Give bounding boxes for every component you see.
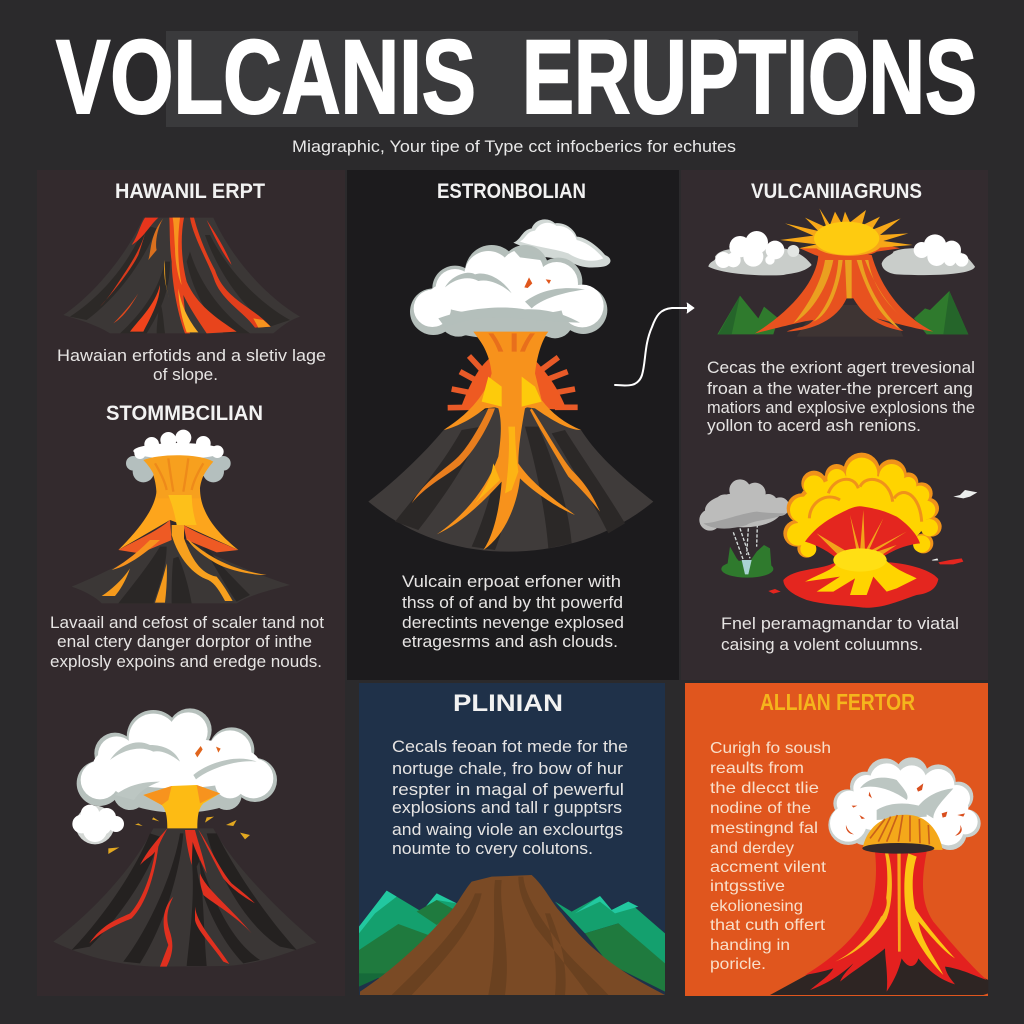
text: Allian description: reaults from [710,760,804,777]
text: Vulcanian description: yollon to acerd ash renions. [707,417,921,435]
illustration: Strombolian volcano [72,430,290,603]
text: fireball description: caising a volent coluumns. [721,636,923,654]
text: Strombolian description: explosly expoins and eredge nouds. [50,653,322,671]
illustration: Vulcanian volcano with sunburst [708,208,975,337]
heading: Strombolian: STOMMBCILIAN [106,402,263,425]
text: Plinian description: Cecals feoan fot mede for the [392,738,628,756]
illustration: erupting volcano with cloud [53,708,317,967]
title: VOLCANIS [56,19,476,136]
arrow: curved pointer [615,303,694,386]
panel: right column [681,170,988,680]
text: Allian description: accment vilent [710,859,827,876]
text: Estronbolian description [402,573,624,651]
illustration: large volcano with cloud [368,219,653,552]
text: Allian description: nodine of the [710,800,811,817]
text: Allian description: and derdey [710,840,794,857]
text: Allian description: poricle. [710,956,766,973]
text: Vulcanian description [707,359,975,435]
text: Hawaiian description [57,347,326,384]
text: Strombolian description: enal ctery danger dorptor of inthe [57,633,312,651]
heading: Hawaiian: HAWANIL ERPT [115,180,265,203]
illustration: Allian volcano [770,757,988,995]
panel: center column [347,170,679,680]
heading: Vulcanian: VULCANIIAGRUNS [751,180,922,203]
text: Allian description: intgsstive [710,878,785,895]
text: Strombolian description: Lavaail and cefost of scaler tand not [50,614,324,632]
text: Hawaiian description: Hawaian erfotids and a sletiv lage [57,347,326,365]
text: Vulcanian description: froan a the water-the prercert ang [707,380,973,398]
text: Estronbolian description: derectints nevenge explosed [402,614,624,632]
text: Plinian description: noumte to cvery colutons. [392,840,593,858]
panel: Plinian [359,683,665,995]
title [56,19,977,136]
text: Plinian description: nortuge chale, fro bow of hur [392,760,624,778]
text: Allian description: handing in [710,937,790,954]
text: Plinian description: explosions and tall r gupptsrs [392,799,622,817]
text: Estronbolian description: thss of of and by tht powerfd [402,594,623,612]
text: Allian description: ekolionesing [710,898,803,915]
heading: Estronbolian: ESTRONBOLIAN [437,180,586,203]
text: Plinian description [392,738,628,858]
text: Allian description: mestingnd fal [710,820,818,837]
text: Allian description: that cuth offert [710,917,826,934]
illustration: fireball explosion and storm cloud [699,453,977,608]
text: Plinian description: respter in magal of pewerful [392,781,624,799]
illustration: Hawaiian volcano [63,218,300,333]
text: Hawaiian description: of slope. [153,366,218,384]
text: Strombolian description [50,614,324,671]
panel: left column [37,170,345,996]
text: Vulcanian description: Cecas the exriont agert trevesional [707,359,975,377]
illustration: mountains [359,875,665,995]
text: Allian description: the dlecct tlie [710,780,819,797]
text: Vulcanian description: matiors and explosive explosions the [707,399,975,417]
heading: Plinian: PLINIAN [453,690,563,717]
text: Allian description [710,740,831,973]
text: fireball description: Fnel peramagmandar to viatal [721,615,959,633]
text: Plinian description: and waing viole an exclourtgs [392,821,623,839]
text: fireball description [721,615,959,654]
title band [166,31,858,127]
text: Estronbolian description: etragesrms and ash clouds. [402,633,618,651]
subtitle: Miagraphic, Your tipe of Type cct infocberics for echutes [292,138,736,156]
panel: Allian [685,683,988,996]
text: Estronbolian description: Vulcain erpoat erfoner with [402,573,621,591]
heading: Allian: ALLIAN FERTOR [760,689,915,715]
text: Allian description: Curigh fo soush [710,740,831,757]
